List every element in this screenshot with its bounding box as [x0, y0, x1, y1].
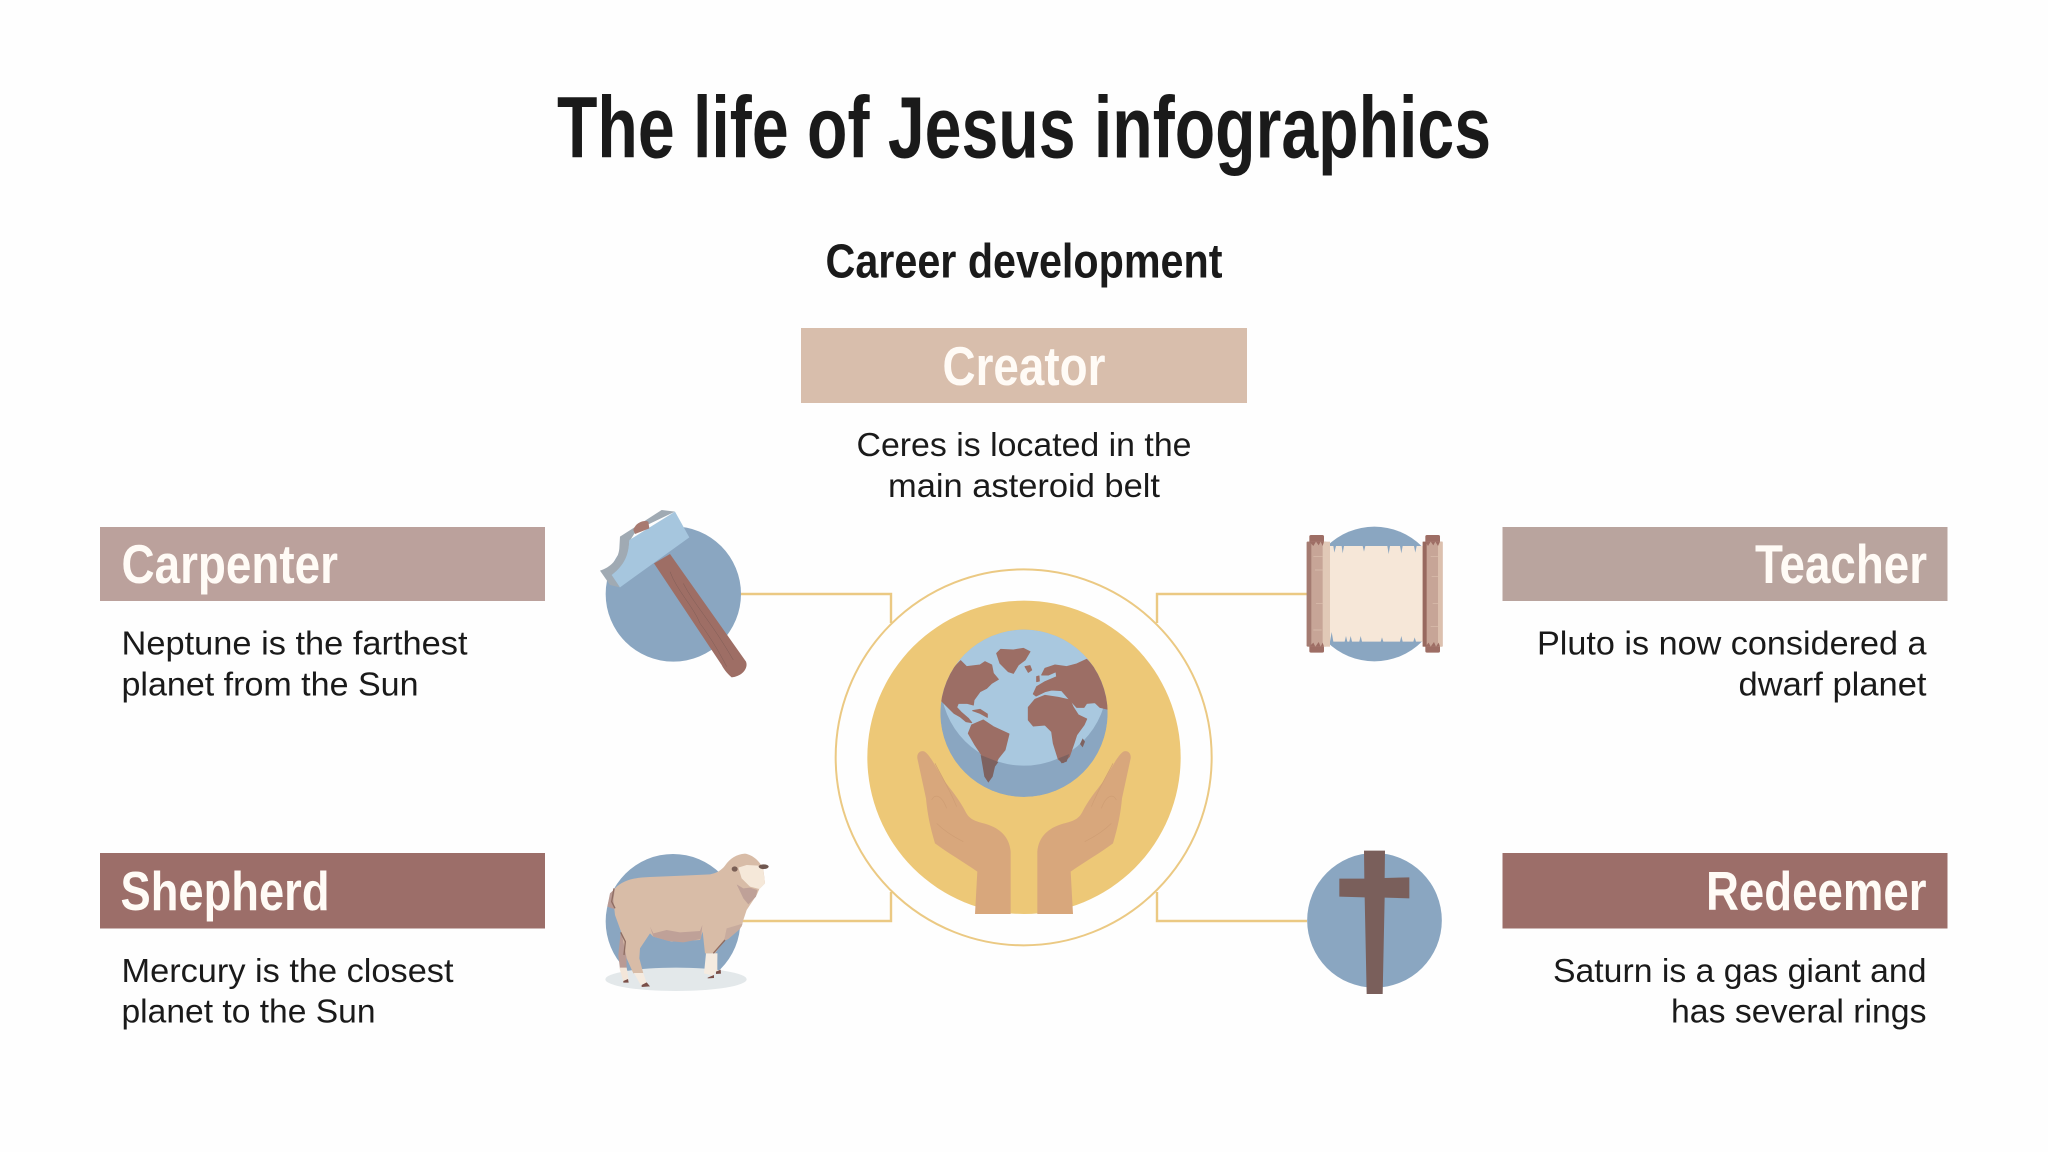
- globe: [940, 630, 1108, 797]
- carpenter heading: Carpenter: [122, 533, 338, 595]
- continent tips in shadow: [981, 738, 1085, 783]
- far hind leg: [618, 932, 627, 969]
- carpenter description: planet from the Sun: [122, 666, 418, 702]
- hooves: [623, 970, 721, 987]
- left hand creases: [932, 763, 963, 842]
- shepherd description: Mercury is the closest: [122, 952, 453, 989]
- creator description: Ceres is located in the: [856, 426, 1192, 463]
- panel: redeemer: [1502, 853, 1948, 1030]
- gold disc: [867, 601, 1181, 914]
- teacher description: dwarf planet: [1738, 666, 1926, 702]
- panel: creator: [801, 328, 1247, 504]
- eye: [732, 866, 738, 872]
- icon: scroll: [1307, 527, 1443, 661]
- continents: [940, 648, 1110, 763]
- left hand: [917, 751, 1011, 914]
- far front leg: [712, 953, 717, 973]
- blue disc: [1307, 853, 1442, 988]
- ocean light: [942, 630, 1106, 766]
- left roller: [1307, 535, 1330, 653]
- teacher heading: Teacher: [1755, 533, 1927, 595]
- creator banner: [801, 328, 1247, 403]
- icon: hands holding globe: [836, 569, 1212, 945]
- parchment: [1327, 546, 1423, 642]
- right hand: [1037, 751, 1131, 914]
- teacher banner: [1502, 527, 1948, 601]
- ear: [759, 864, 769, 869]
- blue disc: [606, 526, 741, 662]
- ground shadow: [605, 968, 747, 991]
- subtitle: Career development: [826, 236, 1223, 288]
- chest shading: [724, 924, 743, 941]
- creator description: main asteroid belt: [888, 467, 1160, 504]
- icon: cross: [1307, 851, 1442, 994]
- redeemer description: Saturn is a gas giant and: [1553, 952, 1926, 989]
- hammer head side: [600, 510, 675, 587]
- hammer crescent: [612, 542, 637, 587]
- panel: carpenter: [100, 527, 545, 702]
- redeemer description: [1553, 952, 1926, 1030]
- icon: sheep: [605, 854, 769, 991]
- teacher description: [1537, 624, 1927, 702]
- redeemer heading: Redeemer: [1706, 860, 1926, 922]
- blue disc: [606, 854, 740, 989]
- outer ring: [836, 569, 1212, 945]
- sheep body: [613, 854, 765, 973]
- carpenter banner: [100, 527, 545, 601]
- hammer handle: [654, 554, 747, 677]
- right roller: [1423, 535, 1443, 653]
- icon: hammer: [600, 510, 747, 677]
- blue disc: [1307, 527, 1442, 661]
- connector lines: [741, 594, 1307, 921]
- near legs: [634, 953, 717, 985]
- shepherd description: planet to the Sun: [122, 992, 376, 1030]
- neck shading: [737, 884, 757, 904]
- ocean shadow: [940, 630, 1108, 797]
- tail: [607, 888, 616, 909]
- wooden cross: [1339, 851, 1409, 994]
- redeemer banner: [1502, 853, 1948, 928]
- shepherd heading: Shepherd: [120, 860, 330, 922]
- face: [738, 865, 765, 889]
- right hand creases: [1085, 763, 1116, 842]
- panel: shepherd: [100, 853, 545, 1030]
- leg shadow lines: [612, 888, 725, 955]
- shepherd description: [122, 952, 453, 1030]
- title: The life of Jesus infographics: [557, 80, 1491, 176]
- hammer wedge: [633, 521, 649, 534]
- handle grain: [670, 572, 733, 667]
- shepherd banner: [100, 853, 545, 928]
- redeemer description: has several rings: [1671, 992, 1926, 1030]
- creator heading: Creator: [942, 335, 1106, 397]
- creator description: [856, 426, 1192, 504]
- panel: teacher: [1502, 527, 1948, 702]
- carpenter description: [122, 624, 468, 702]
- hammer head face: [613, 512, 689, 587]
- rings and hands: [836, 569, 1212, 945]
- belly shading: [650, 925, 702, 942]
- teacher description: Pluto is now considered a: [1537, 624, 1927, 662]
- carpenter description: Neptune is the farthest: [122, 624, 468, 662]
